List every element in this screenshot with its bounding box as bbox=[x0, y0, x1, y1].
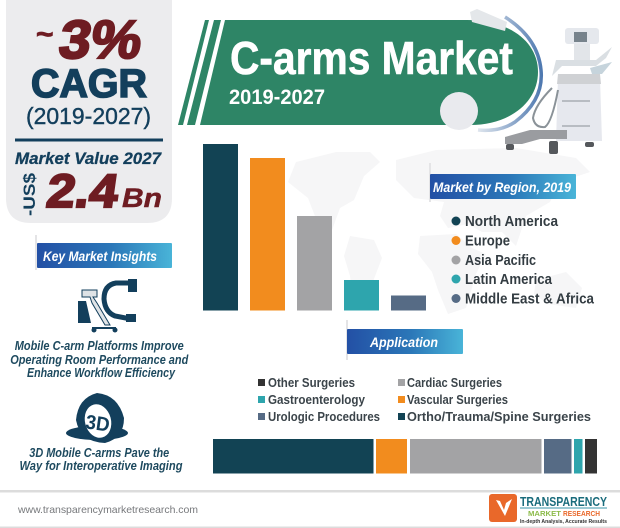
text: mobile C-arm insight: Enhance Workflow Efficiency bbox=[27, 366, 176, 380]
heading ribbon: Key Market Insights bbox=[35, 235, 172, 270]
segment: Other bbox=[585, 439, 597, 474]
market value figure: -US$ bbox=[20, 172, 39, 216]
bar: Middle East & Africa bbox=[391, 296, 426, 310]
legend item: Latin America: Latin America bbox=[465, 272, 553, 288]
logo subtitle: MARKET bbox=[528, 509, 561, 518]
market value figure bbox=[20, 165, 162, 218]
text: 3D C-arm insight: Way for Interoperative Imaging bbox=[20, 459, 183, 473]
legend item: Urologic Procedures: Urologic Procedures bbox=[268, 409, 380, 424]
segment: Ortho/Trauma/Spine bbox=[213, 439, 374, 474]
heading ribbon: Market by Region: Market by Region, 2019 bbox=[433, 180, 571, 195]
CAGR period: (2019-2027) bbox=[26, 103, 151, 129]
logo tagline: In-depth Analysis, Accurate Results bbox=[520, 519, 607, 525]
legend item: Europe: Europe bbox=[465, 234, 510, 250]
legend item: Vascular Surgeries: Vascular Surgeries bbox=[407, 392, 508, 407]
heading ribbon: Application bbox=[346, 320, 463, 360]
CAGR percentage: 3% bbox=[55, 9, 147, 70]
legend item: Asia Pacific: Asia Pacific bbox=[465, 253, 536, 269]
logo mark bbox=[489, 494, 517, 522]
heading ribbon: Key Market Insights: Key Market Insights bbox=[43, 248, 157, 264]
bar: Asia Pacific bbox=[297, 216, 332, 310]
bar: Latin America bbox=[344, 280, 379, 310]
title banner bbox=[178, 20, 538, 125]
logo: Transparency Market Research bbox=[489, 494, 607, 525]
legend: application bbox=[258, 375, 591, 424]
image: C-arm machine bbox=[440, 9, 612, 154]
segment: Vascular bbox=[376, 439, 407, 474]
text: mobile C-arm insight: Operating Room Performance and bbox=[10, 353, 189, 367]
legend item: Middle East & Africa: Middle East & Africa bbox=[465, 292, 595, 308]
logo subtitle bbox=[528, 509, 600, 518]
chart: market by region bars bbox=[203, 144, 426, 310]
logo subtitle: RESEARCH bbox=[563, 509, 600, 518]
segment: Urologic bbox=[544, 439, 572, 474]
market value figure: Bn bbox=[122, 183, 162, 213]
legend item: Gastroenterology: Gastroenterology bbox=[268, 392, 366, 407]
title years: 2019-2027 bbox=[229, 86, 325, 109]
divider bbox=[15, 138, 163, 142]
icon: 3D C-arm: 3D bbox=[84, 411, 111, 437]
legend item: North America: North America bbox=[465, 214, 559, 230]
segment: Gastroenterology bbox=[574, 439, 582, 474]
text: mobile C-arm insight: Mobile C-arm Platforms Improve bbox=[15, 339, 184, 353]
title: C-arms Market bbox=[230, 32, 513, 84]
icon: 3D C-arm bbox=[66, 393, 128, 443]
legend: regions bbox=[452, 214, 595, 308]
legend item: Ortho/Trauma/Spine Surgeries: Ortho/Trauma/Spine Surgeries bbox=[407, 409, 591, 424]
market value figure: 2.4 bbox=[43, 165, 122, 218]
segment: Cardiac bbox=[410, 439, 542, 474]
world map background bbox=[288, 148, 590, 314]
legend item: Other Surgeries: Other Surgeries bbox=[268, 375, 355, 390]
legend item: Cardiac Surgeries: Cardiac Surgeries bbox=[407, 375, 502, 390]
heading ribbon: Application: Application bbox=[369, 334, 438, 350]
icon: C-arm machine bbox=[78, 279, 137, 332]
market value heading: Market Value 2027 bbox=[15, 149, 163, 168]
text: 3D C-arm insight: 3D Mobile C-arms Pave the bbox=[29, 446, 169, 460]
heading ribbon: Market by Region bbox=[429, 163, 576, 202]
panel: CAGR and market value bbox=[6, 0, 172, 223]
footer website: www.transparencymarketresearch.com bbox=[17, 504, 198, 516]
CAGR percentage: ~ bbox=[36, 18, 54, 51]
bar: North America bbox=[203, 144, 238, 310]
CAGR label: CAGR bbox=[31, 62, 147, 106]
bar: Europe bbox=[250, 158, 285, 310]
chart: application stacked bar bbox=[213, 439, 597, 474]
